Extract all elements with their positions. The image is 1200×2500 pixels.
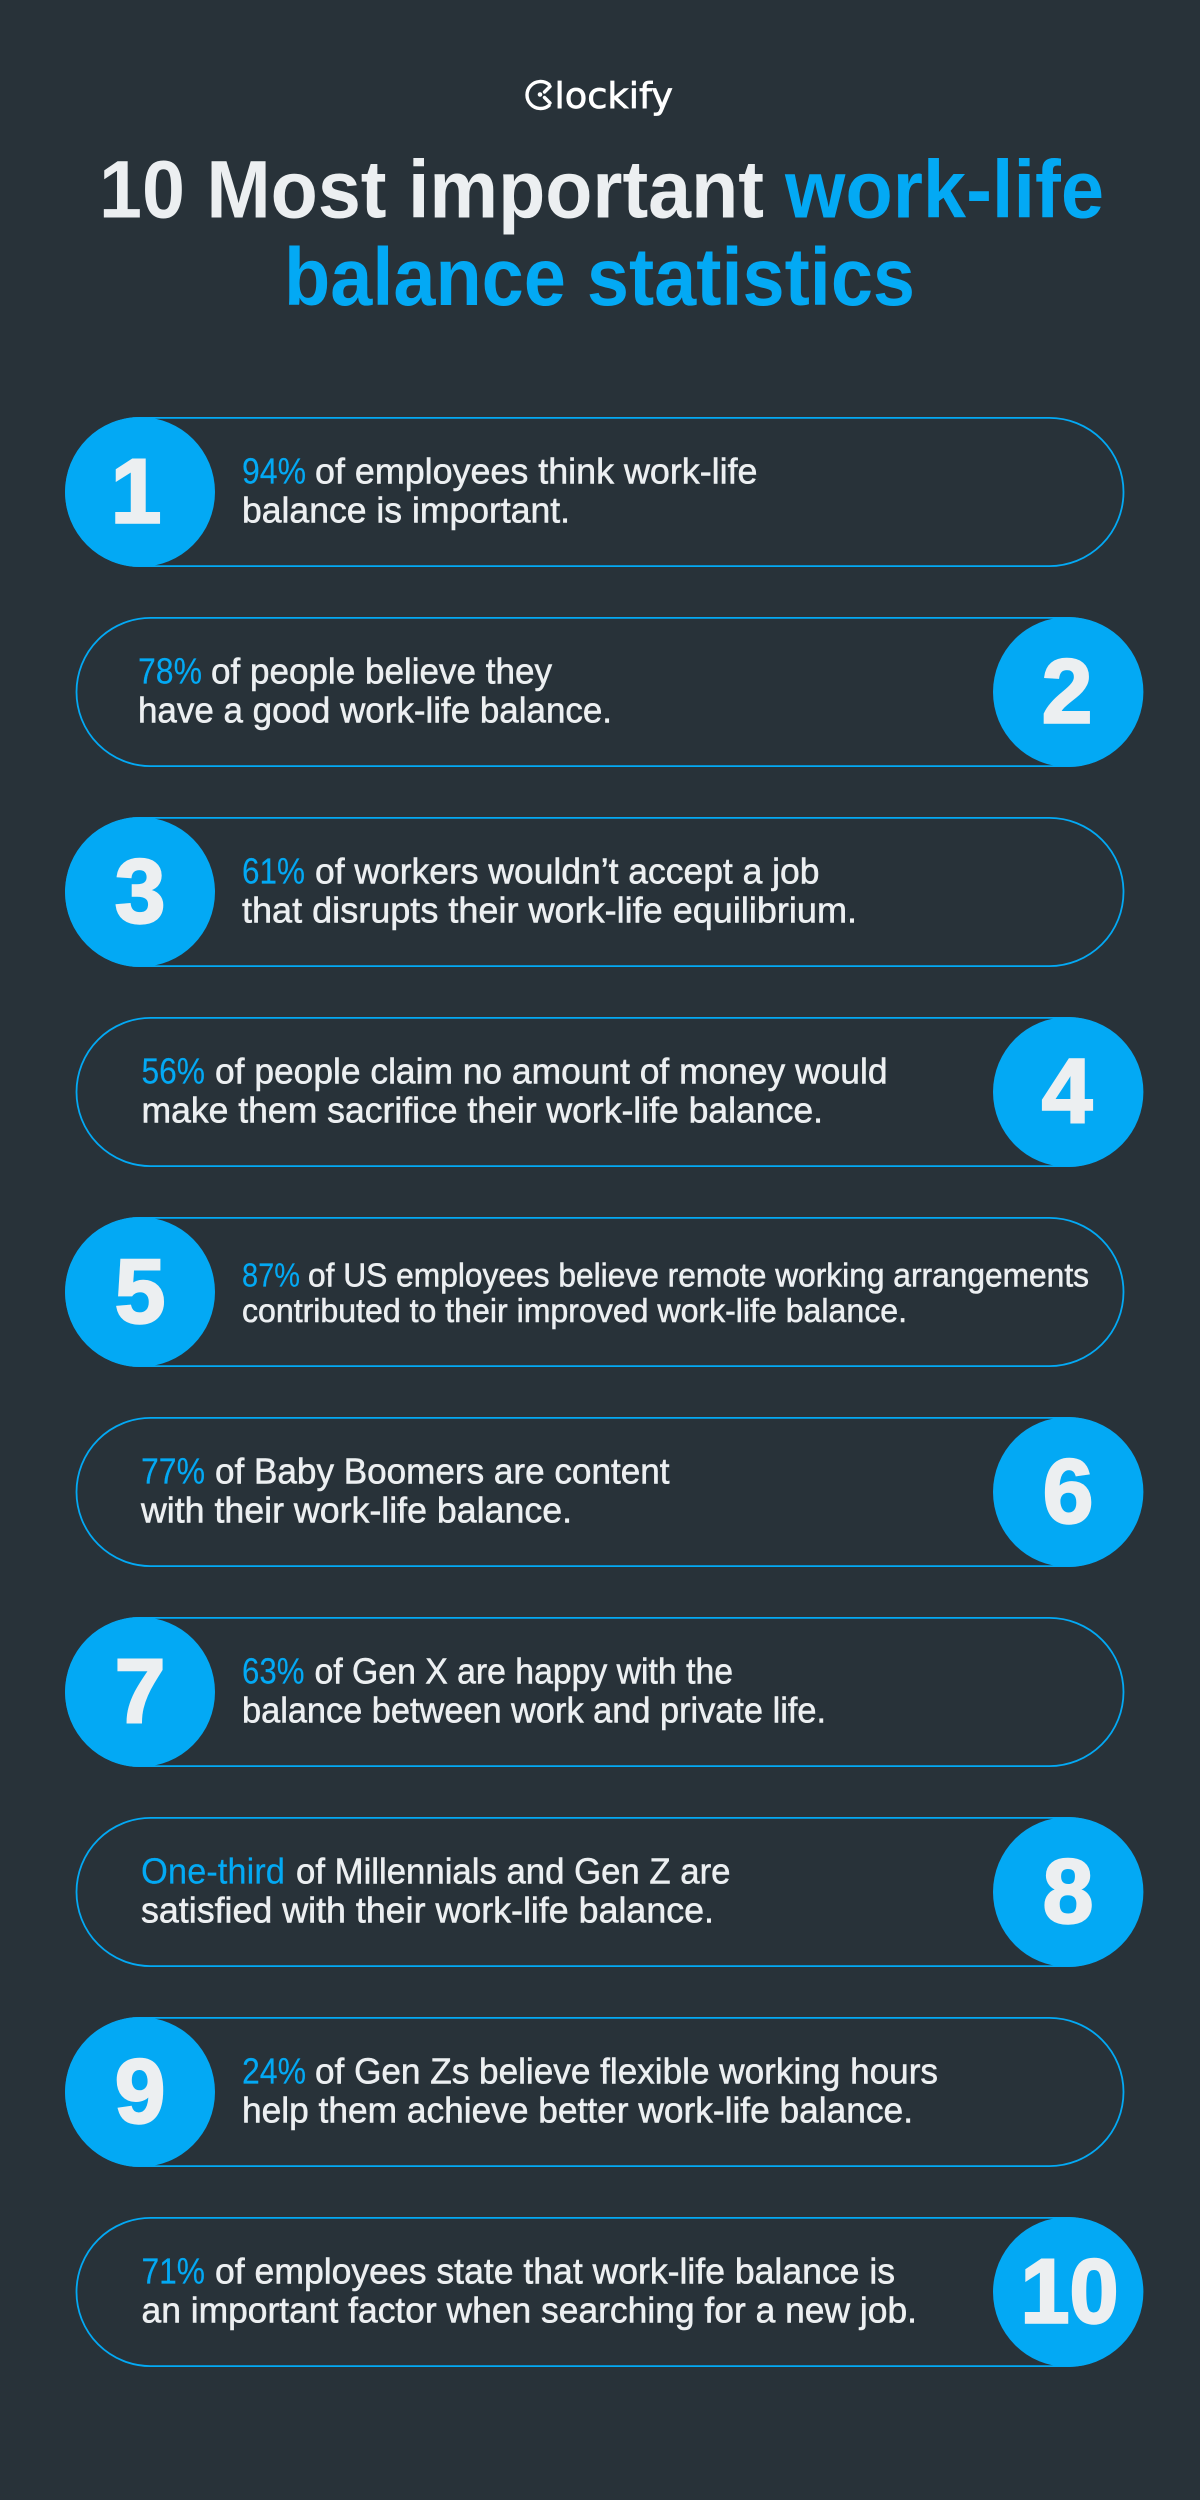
statistic text: contributed to their improved work-life balance. (242, 1293, 907, 1330)
pill outline (66, 1618, 1124, 1766)
panel: statistic 9 (65, 2017, 1124, 2167)
statistic text: make them sacrifice their work-life balance. (142, 1090, 823, 1130)
title line 2: balance statistics (284, 232, 915, 323)
statistic text: 94% (242, 450, 306, 492)
pill outline (76, 1818, 1142, 1966)
panel: statistic 5 (65, 1217, 1124, 1367)
statistic text: 77% (141, 1450, 205, 1492)
statistic text: of Gen X are happy with the (314, 1650, 733, 1692)
pill outline (76, 1418, 1142, 1566)
statistic text: have a good work-life balance. (138, 690, 612, 730)
statistic text: with their work-life balance. (140, 1490, 572, 1530)
number badge 3 (65, 817, 215, 967)
pill outline (76, 1018, 1142, 1166)
statistic text (242, 1258, 1089, 1330)
statistic text (242, 850, 857, 930)
number badge 9 (65, 2017, 215, 2167)
statistic text: 71% (142, 2250, 205, 2292)
pill outline (76, 2218, 1142, 2366)
pill outline (66, 1218, 1124, 1366)
number: 1 (111, 442, 161, 542)
number badge 5 (65, 1217, 215, 1367)
statistic text (242, 1650, 826, 1730)
panel: statistic 4 (76, 1017, 1143, 1167)
number: 4 (1042, 1042, 1093, 1142)
statistic text: 78% (138, 650, 202, 692)
number: 5 (115, 1242, 165, 1342)
statistic text (242, 2050, 938, 2130)
statistic text (138, 650, 612, 730)
statistic text (142, 2250, 917, 2330)
panel: statistic 10 (76, 2217, 1143, 2367)
statistic text: help them achieve better work-life balance. (242, 2090, 913, 2130)
panel: statistic 2 (76, 617, 1143, 767)
number badge 6 (993, 1417, 1143, 1567)
number: 7 (115, 1642, 165, 1742)
statistic text: One-third (141, 1850, 285, 1892)
logo wordmark: lockify (554, 76, 673, 117)
number badge 2 (993, 617, 1143, 767)
panel: statistic 1 (65, 417, 1124, 567)
pill outline (66, 418, 1124, 566)
statistic text (242, 450, 758, 530)
statistic text: an important factor when searching for a new job. (142, 2290, 917, 2330)
statistic text: 87% (242, 1258, 300, 1294)
panel: statistic 6 (76, 1417, 1143, 1567)
statistic text: satisfied with their work-life balance. (141, 1890, 714, 1930)
statistic text: of employees think work-life (315, 450, 758, 492)
number: 10 (1020, 2242, 1118, 2342)
statistic text: 24% (242, 2050, 306, 2092)
number badge 4 (993, 1017, 1143, 1167)
icon: clock C (527, 81, 550, 108)
statistic text: balance is important. (242, 490, 570, 530)
statistic text: of US employees believe remote working arrangements (308, 1258, 1089, 1294)
number badge 1 (65, 417, 215, 567)
statistic text: of Gen Zs believe flexible working hours (315, 2050, 938, 2092)
number: 8 (1043, 1842, 1093, 1942)
statistic text: balance between work and private life. (242, 1690, 826, 1730)
statistic text: of workers wouldn’t accept a job (315, 850, 820, 892)
statistic text: of people believe they (211, 650, 552, 692)
statistic text (141, 1850, 730, 1930)
statistic text: that disrupts their work-life equilibrium. (242, 890, 857, 930)
number: 2 (1042, 642, 1092, 742)
pill outline (76, 618, 1142, 766)
panel: statistic 3 (65, 817, 1124, 967)
title line 1: work-life (784, 144, 1104, 236)
number badge 10 (993, 2217, 1143, 2367)
number: 9 (115, 2042, 165, 2142)
number: 3 (115, 842, 165, 942)
statistic text: 56% (142, 1050, 205, 1092)
pill outline (66, 2018, 1124, 2166)
statistic text: of Millennials and Gen Z are (296, 1850, 730, 1892)
statistic text: 61% (242, 850, 305, 892)
title line 1: 10 Most important (99, 144, 764, 236)
number badge 8 (993, 1817, 1143, 1967)
panel: statistic 7 (65, 1617, 1124, 1767)
statistic text: of people claim no amount of money would (215, 1050, 888, 1092)
statistic text: 63% (242, 1650, 304, 1692)
statistic text: of Baby Boomers are content (215, 1450, 670, 1492)
statistic text: of employees state that work-life balance is (215, 2250, 895, 2292)
pill outline (66, 818, 1124, 966)
title (99, 144, 1104, 323)
panel: statistic 8 (76, 1817, 1143, 1967)
number badge 7 (65, 1617, 215, 1767)
statistic text (142, 1050, 888, 1130)
number: 6 (1043, 1442, 1093, 1542)
logo: Clockify (527, 76, 673, 117)
statistic text (140, 1450, 670, 1530)
